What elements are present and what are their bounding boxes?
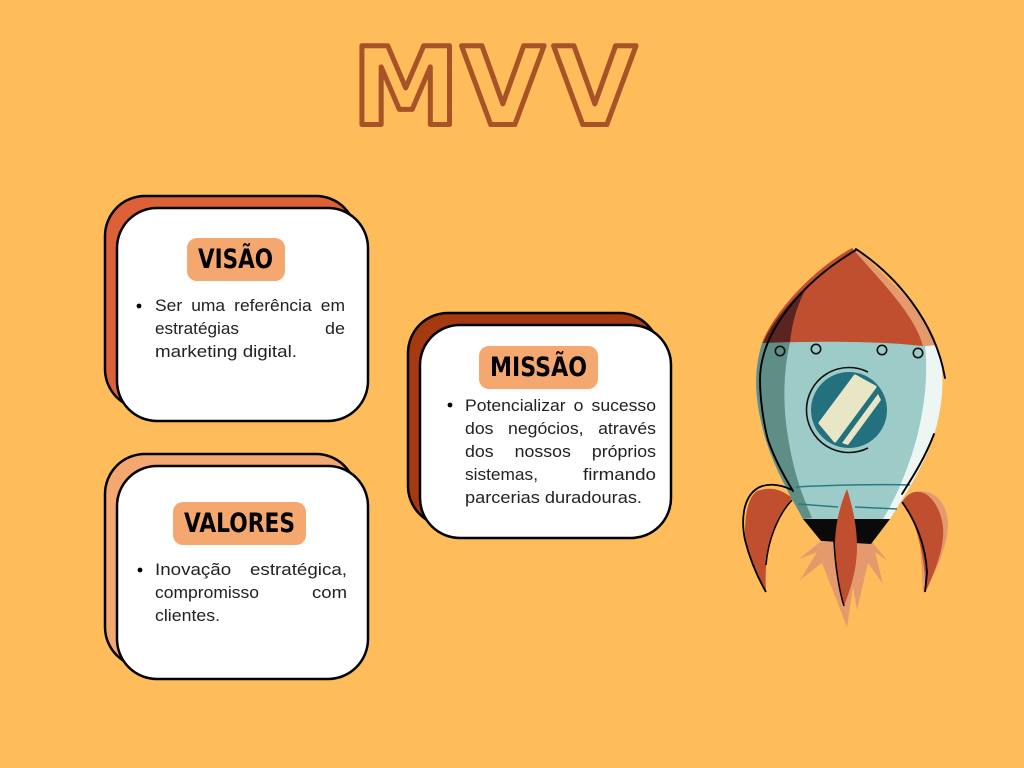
title [352, 26, 637, 150]
panel: missão: firmando [583, 466, 656, 484]
panel: missão: dos negócios, através [465, 420, 656, 438]
icon: rocket [743, 248, 948, 627]
panel: missão: dos nossos próprios [465, 443, 656, 461]
right fin [902, 491, 948, 593]
panel: missão: Potencializar o sucesso [465, 397, 656, 415]
panel: visão [105, 196, 368, 421]
panel: missão: parcerias duradouras. [465, 489, 642, 507]
panel: missão: sistemas, [465, 466, 538, 484]
panel: visão: VISÃO [198, 243, 273, 275]
title: V [553, 26, 637, 150]
panel: valores [105, 454, 368, 679]
flames [799, 542, 888, 627]
title: V [461, 26, 545, 150]
rocket body [756, 340, 942, 519]
panel: visão: marketing digital. [155, 343, 297, 361]
outline [760, 249, 945, 494]
left fin [743, 485, 792, 592]
panel: visão: de [325, 320, 345, 338]
panel: missão: MISSÃO [490, 351, 587, 383]
panel: valores: com [312, 584, 347, 602]
centre fin [834, 489, 857, 606]
body bands [796, 485, 910, 509]
nose cone [762, 248, 937, 346]
panel: missão [408, 313, 671, 538]
panel: valores: compromisso [155, 584, 259, 602]
panel: valores: VALORES [184, 508, 295, 539]
engine base [803, 519, 890, 544]
panel: visão: estratégias [155, 320, 239, 338]
panel: visão: Ser uma referência em [155, 297, 345, 315]
rivets [775, 344, 923, 358]
title: M [352, 26, 459, 150]
panel: valores: clientes. [155, 607, 220, 625]
window [806, 368, 887, 452]
panel: valores: Inovação estratégica, [155, 561, 347, 579]
